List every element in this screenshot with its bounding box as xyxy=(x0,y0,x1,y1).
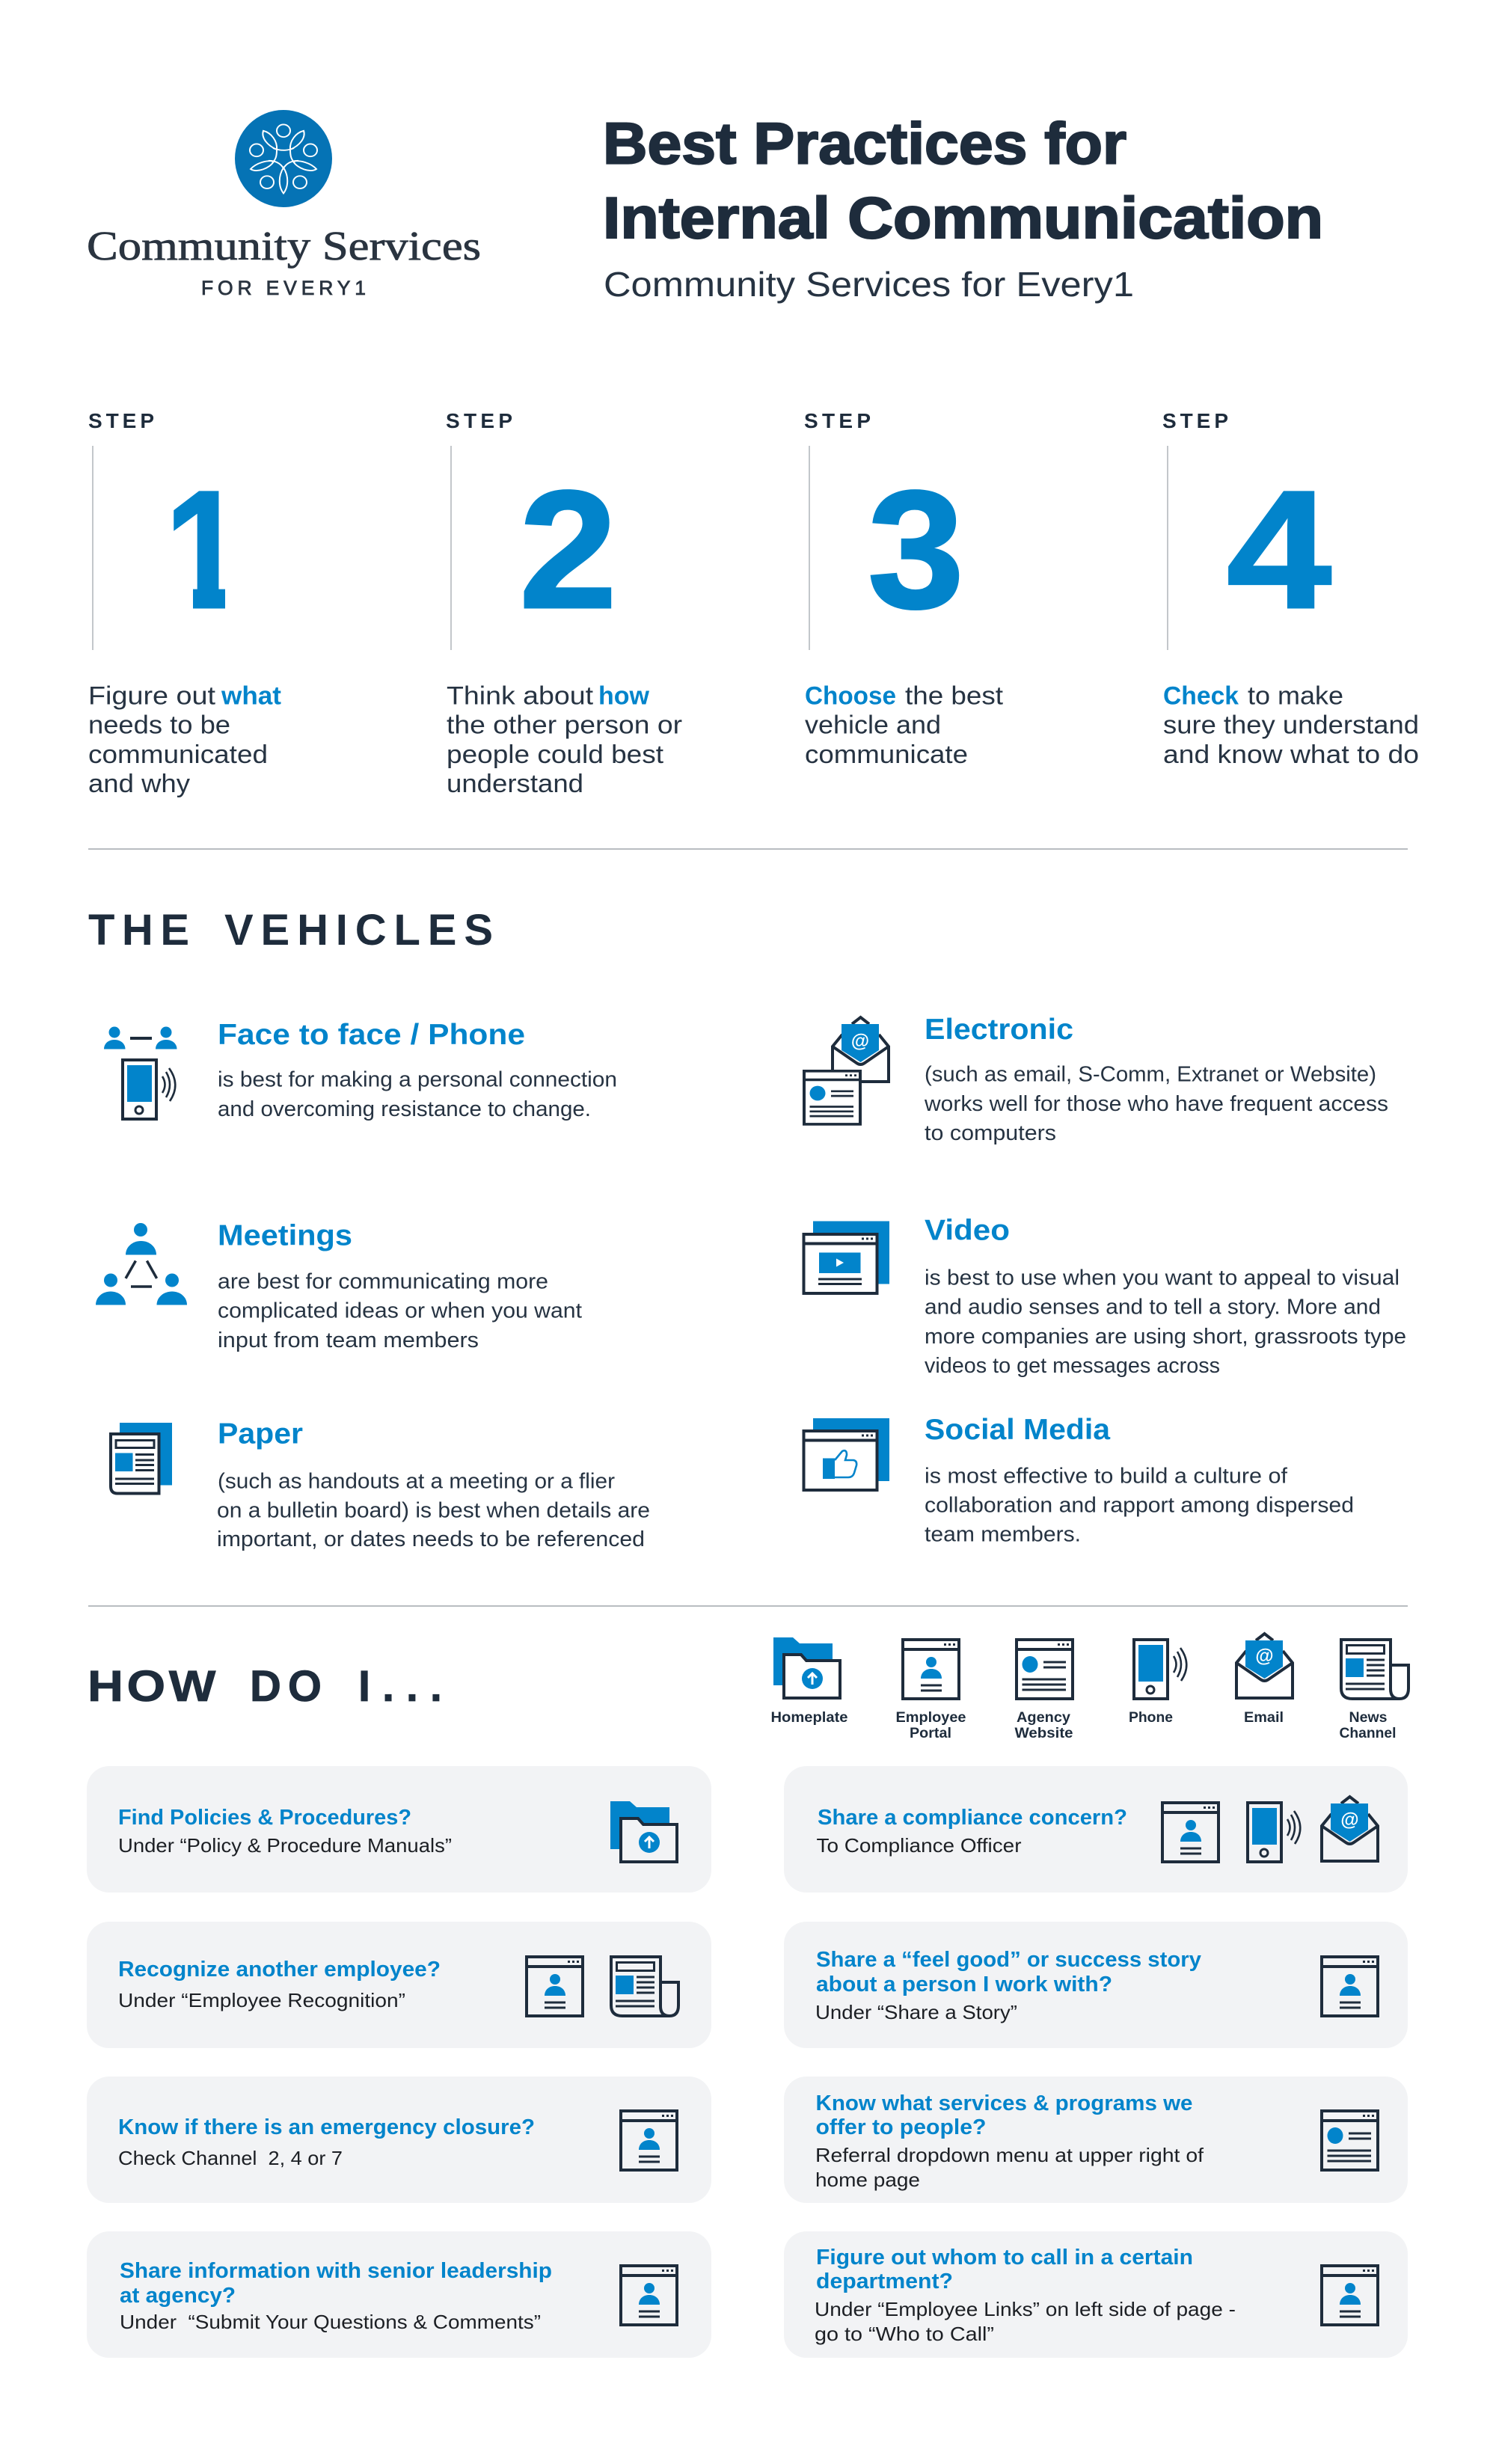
answer: Under “Policy & Procedure Manuals” xyxy=(118,1834,452,1857)
step 3 text: communicate xyxy=(805,741,968,769)
panel: step 4 xyxy=(1162,409,1419,769)
icon: video window xyxy=(803,1221,889,1293)
icon: phone xyxy=(1248,1803,1300,1862)
icon: news channel xyxy=(611,1957,678,2016)
step 2 text xyxy=(447,682,682,798)
legend: employee portal: Employee xyxy=(896,1710,966,1726)
subtitle: Community Services for Every1 xyxy=(604,265,1134,304)
question: Figure out whom to call in a certain xyxy=(816,2246,1193,2270)
panel: step 3 xyxy=(804,409,1004,769)
legend: news channel xyxy=(1339,1640,1408,1741)
card: whom to call xyxy=(784,2231,1408,2358)
answer: Under “Share a Story” xyxy=(815,2001,1017,2023)
legend: employee portal xyxy=(896,1640,966,1741)
icon: employee portal xyxy=(621,2266,677,2325)
legend: phone: Phone xyxy=(1129,1710,1173,1726)
card: find policies and procedures xyxy=(87,1766,711,1893)
card: recognize another employee xyxy=(87,1922,711,2048)
heading: how do i xyxy=(88,1662,442,1711)
answer xyxy=(815,2144,1204,2191)
icon: email: @ xyxy=(1340,1809,1359,1830)
card: share information with senior leadership xyxy=(87,2231,711,2358)
body text: on a bulletin board) is best when details are xyxy=(217,1499,650,1523)
icon: people and phone xyxy=(104,1026,177,1119)
panel: paper xyxy=(111,1418,650,1551)
panel: video xyxy=(803,1215,1406,1378)
body text xyxy=(925,1465,1354,1547)
heading: the vehicles: THE xyxy=(88,906,189,954)
question: Know if there is an emergency closure? xyxy=(118,2115,535,2139)
heading: the vehicles: VEHICLES xyxy=(224,906,493,954)
icon: agency website xyxy=(1322,2111,1378,2170)
icon: newspaper stack xyxy=(111,1423,172,1493)
step 3 text xyxy=(805,682,1004,769)
answer: Under “Employee Recognition” xyxy=(118,1989,405,2011)
icon: envelope and web page xyxy=(803,1017,889,1125)
step 4 number: 4 xyxy=(1227,456,1331,643)
step 3 text: Choose xyxy=(805,682,896,711)
panel: step 2 xyxy=(446,409,682,798)
panel: electronic xyxy=(803,1014,1388,1145)
title line 2: Internal Communication xyxy=(603,185,1323,251)
legend: news channel: Channel xyxy=(1339,1726,1396,1741)
heading: how do i: I... xyxy=(358,1662,442,1711)
card: share a feel good story xyxy=(784,1922,1408,2048)
body text: is best for making a personal connection xyxy=(218,1068,617,1092)
body text: (such as email, S-Comm, Extranet or Website) xyxy=(925,1062,1376,1086)
card: emergency closure xyxy=(87,2077,711,2203)
step 2 label: STEP xyxy=(446,409,512,432)
legend: homeplate: Homeplate xyxy=(770,1710,848,1726)
icon: employee portal xyxy=(621,2111,677,2170)
body text xyxy=(218,1068,617,1121)
question xyxy=(816,2246,1193,2293)
legend: phone xyxy=(1129,1640,1186,1726)
panel: social media xyxy=(803,1414,1354,1547)
step 3 text: vehicle and xyxy=(805,711,941,739)
body text: input from team members xyxy=(218,1328,479,1352)
answer: Under “Submit Your Questions & Comments” xyxy=(120,2311,541,2333)
legend: email: Email xyxy=(1244,1710,1284,1726)
step 2 text: people could best xyxy=(447,741,664,769)
logo xyxy=(87,110,481,299)
body text: is best to use when you want to appeal to visual xyxy=(925,1266,1400,1290)
question: about a person I work with? xyxy=(816,1973,1112,1996)
step 1 text: communicated xyxy=(88,741,268,769)
body text: is most effective to build a culture of xyxy=(925,1465,1288,1489)
step 4 label: STEP xyxy=(1162,409,1228,432)
question: Share a compliance concern? xyxy=(818,1806,1127,1830)
question xyxy=(815,2091,1192,2139)
step 1 number: 1 xyxy=(165,456,244,643)
body text xyxy=(924,1062,1388,1145)
body text: are best for communicating more xyxy=(218,1270,548,1294)
panel: face to face / phone xyxy=(104,1019,617,1121)
answer: go to “Who to Call” xyxy=(815,2323,994,2345)
legend: email xyxy=(1236,1634,1293,1726)
card: share a compliance concern xyxy=(784,1766,1408,1893)
icon: employee portal xyxy=(1162,1803,1218,1862)
step 4 text: Check xyxy=(1163,682,1239,711)
panel: step 1 xyxy=(88,409,281,798)
heading: Paper xyxy=(218,1418,303,1450)
question: Know what services & programs we xyxy=(815,2091,1192,2115)
step 1 text: and why xyxy=(88,770,190,798)
logo tagline: FOR EVERY1 xyxy=(201,277,366,299)
heading: how do i: HOW xyxy=(88,1662,219,1711)
heading: Electronic xyxy=(925,1014,1073,1046)
question: Find Policies & Procedures? xyxy=(118,1806,411,1830)
question: Share information with senior leadership xyxy=(120,2259,552,2283)
body text: to computers xyxy=(925,1121,1056,1145)
heading: Social Media xyxy=(925,1414,1110,1446)
icon: logo emblem xyxy=(235,110,332,207)
question: Recognize another employee? xyxy=(118,1958,441,1982)
body text xyxy=(925,1266,1406,1378)
body text: (such as handouts at a meeting or a flier xyxy=(218,1469,615,1493)
icon: homeplate folder xyxy=(610,1801,677,1862)
legend: agency website: Agency xyxy=(1017,1710,1070,1726)
body text: important, or dates needs to be referenced xyxy=(217,1527,645,1551)
icon: email xyxy=(1322,1797,1378,1861)
step 4 text: to make xyxy=(1248,682,1343,711)
step 1 text: what xyxy=(221,682,281,711)
heading: the vehicles xyxy=(88,906,493,954)
question: offer to people? xyxy=(815,2115,986,2139)
heading: Meetings xyxy=(218,1219,352,1252)
icon: envelope and web page: @ xyxy=(851,1031,869,1052)
question xyxy=(120,2259,552,2308)
title line 1: Best Practices for xyxy=(603,111,1126,177)
body text: videos to get messages across xyxy=(925,1354,1220,1378)
step 1 label: STEP xyxy=(88,409,154,432)
icon: meeting triangle of people xyxy=(96,1223,187,1305)
title xyxy=(603,111,1323,304)
legend xyxy=(770,1634,1408,1741)
legend: homeplate xyxy=(770,1637,848,1726)
step 1 text xyxy=(88,682,281,798)
body text: team members. xyxy=(925,1523,1081,1547)
step 4 text: and know what to do xyxy=(1163,741,1419,769)
answer: Referral dropdown menu at upper right of xyxy=(815,2144,1204,2166)
step 2 text: Think about xyxy=(447,682,594,711)
step 3 text: the best xyxy=(905,682,1004,711)
body text xyxy=(218,1270,582,1352)
body text xyxy=(217,1469,650,1551)
legend: agency website: Website xyxy=(1014,1726,1073,1741)
legend: agency website xyxy=(1014,1640,1073,1741)
question: department? xyxy=(816,2270,953,2293)
legend: employee portal: Portal xyxy=(910,1726,951,1741)
question xyxy=(816,1948,1201,1996)
body text: works well for those who have frequent access xyxy=(924,1092,1388,1116)
step 4 text xyxy=(1163,682,1419,769)
step 2 text: how xyxy=(598,682,650,711)
step 3 number: 3 xyxy=(868,456,964,643)
step 1 text: Figure out xyxy=(88,682,216,711)
heading: Face to face / Phone xyxy=(218,1019,525,1051)
body text: collaboration and rapport among dispersed xyxy=(925,1493,1354,1517)
answer: Check Channel 2, 4 or 7 xyxy=(118,2147,343,2169)
body text: complicated ideas or when you want xyxy=(218,1299,582,1323)
question: at agency? xyxy=(120,2284,236,2308)
heading: Video xyxy=(925,1215,1010,1246)
card: services and programs xyxy=(784,2077,1408,2203)
answer: Under “Employee Links” on left side of page - xyxy=(815,2298,1236,2320)
step 4 text: sure they understand xyxy=(1163,711,1419,739)
answer xyxy=(815,2298,1236,2345)
body text: more companies are using short, grassroots type xyxy=(925,1325,1406,1349)
body text: and audio senses and to tell a story. More and xyxy=(925,1296,1381,1320)
step 2 number: 2 xyxy=(519,456,617,643)
logo wordmark: Community Services xyxy=(87,223,481,269)
panel: meetings xyxy=(96,1219,582,1352)
legend: news channel: News xyxy=(1349,1710,1387,1726)
icon: thumbs-up window xyxy=(803,1418,889,1490)
icon: employee portal xyxy=(527,1957,583,2016)
answer: To Compliance Officer xyxy=(817,1834,1022,1857)
step 1 text: needs to be xyxy=(88,711,230,739)
step 2 text: understand xyxy=(447,770,583,798)
body text: and overcoming resistance to change. xyxy=(218,1097,591,1121)
step 3 label: STEP xyxy=(804,409,871,432)
icon: employee portal xyxy=(1322,2266,1378,2325)
question: Share a “feel good” or success story xyxy=(816,1948,1201,1972)
legend: email: @ xyxy=(1255,1646,1274,1667)
answer: home page xyxy=(815,2169,920,2191)
heading: how do i: DO xyxy=(250,1662,322,1711)
step 2 text: the other person or xyxy=(447,711,682,739)
icon: employee portal xyxy=(1322,1957,1378,2016)
